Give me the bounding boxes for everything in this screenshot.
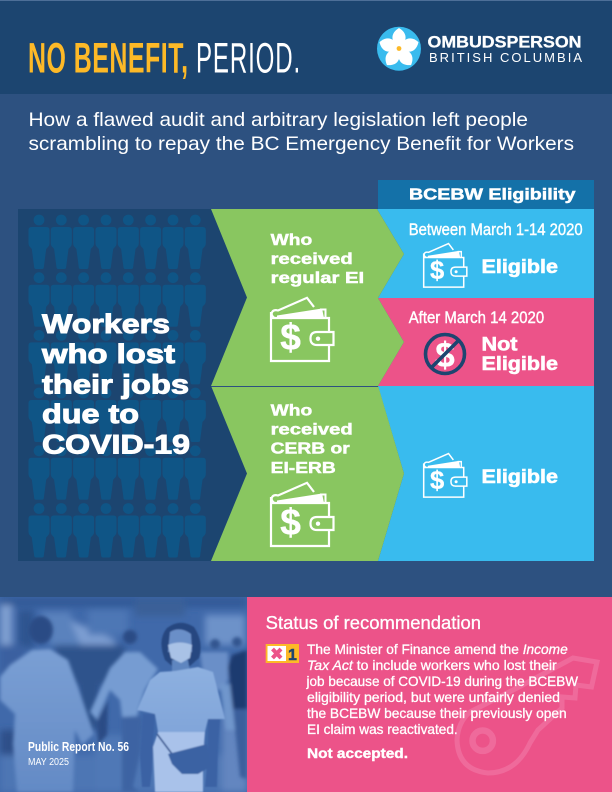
report label: Public Report No. 56 xyxy=(28,740,129,754)
heading: workers: who lost xyxy=(41,339,175,369)
icon: rejected recommendation 1 badge: 1 xyxy=(288,647,297,664)
recommendation text: job because of COVID-19 during the BCEBW xyxy=(306,674,578,689)
chevron: received CERB or EI-ERB xyxy=(211,387,404,561)
icon: wallet xyxy=(271,298,334,361)
icon: rejected recommendation 1 badge xyxy=(266,644,299,664)
status: not accepted: Not accepted. xyxy=(307,745,408,761)
icon: wallet xyxy=(271,483,334,546)
chevron: received regular EI: Who xyxy=(271,232,312,249)
panel: workers who lost their jobs xyxy=(18,209,247,561)
recommendation text xyxy=(306,642,578,737)
panel: eligible between March 1-14 2020: Between March 1-14 2020 xyxy=(409,221,583,239)
panel: eligible CERB or EI-ERB xyxy=(378,386,594,561)
header band xyxy=(0,1,612,94)
panel: not eligible after March 14 2020: Not xyxy=(482,335,518,356)
logo: Ombudsperson British Columbia xyxy=(377,27,582,71)
figure: man in middle xyxy=(90,630,158,792)
heading: workers: due to xyxy=(42,399,139,429)
heading: workers: their jobs xyxy=(42,370,189,400)
panel: not eligible after March 14 2020: After March 14 2020 xyxy=(409,309,544,327)
panel: status of recommendation xyxy=(247,597,612,792)
recommendation text: Tax Act to include workers who lost their xyxy=(307,658,557,673)
figure: people at right xyxy=(200,637,247,779)
chevron: received regular EI: regular EI xyxy=(271,270,364,287)
title: NO BENEFIT, xyxy=(28,35,188,82)
subtitle: scrambling to repay the BC Emergency Benefit for Workers xyxy=(28,133,574,155)
chevron: received regular EI xyxy=(211,209,404,386)
panel: BCEBW eligibility heading xyxy=(378,180,594,209)
panel: not eligible after March 14 2020: Eligible xyxy=(482,354,558,375)
chevron: received CERB or EI-ERB: received xyxy=(271,422,353,438)
panel: not eligible after March 14 2020 xyxy=(378,298,594,386)
panel: eligible CERB or EI-ERB: Eligible xyxy=(482,467,558,488)
photo: masked woman walking in a crowd xyxy=(0,597,247,792)
heading: workers: COVID-19 xyxy=(42,430,190,460)
figure: woman xyxy=(137,623,225,792)
subtitle xyxy=(28,109,574,155)
subtitle: How a flawed audit and arbitrary legislation left people xyxy=(28,109,528,131)
report label: MAY 2025 xyxy=(28,757,69,768)
heading: workers xyxy=(41,309,190,460)
icon: wallet xyxy=(424,244,467,287)
panel: eligible between March 1-14 2020: Eligible xyxy=(482,257,558,278)
logo: Ombudsperson British Columbia: OMBUDSPERSON xyxy=(428,34,582,52)
heading: Status of recommendation xyxy=(266,613,481,633)
title: PERIOD. xyxy=(196,34,300,82)
icon: key watermark xyxy=(457,658,597,773)
figure: man at left xyxy=(0,616,94,792)
chevron: received CERB or EI-ERB: EI-ERB xyxy=(271,460,336,477)
panel: eligible between March 1-14 2020 xyxy=(377,209,594,298)
chevron: received CERB or EI-ERB: CERB or xyxy=(271,440,350,458)
icon: no dollar: $ xyxy=(435,336,455,375)
logo: Ombudsperson British Columbia: BRITISH COLUMBIA xyxy=(429,50,582,65)
icon grid: people xyxy=(28,215,206,558)
panel: BCEBW eligibility heading: BCEBW Eligibility xyxy=(409,186,576,204)
recommendation text: eligibility period, but were unfairly denied xyxy=(307,690,560,705)
recommendation text: EI claim was reactivated. xyxy=(307,722,458,737)
icon: wallet xyxy=(424,454,467,497)
icon: no dollar xyxy=(426,334,464,375)
heading: workers: Workers xyxy=(42,309,170,339)
chevron: received regular EI: received xyxy=(271,251,353,268)
title xyxy=(28,34,300,82)
recommendation text: The Minister of Finance amend the Income xyxy=(307,642,568,657)
recommendation text: the BCEBW because their previously open xyxy=(307,706,567,721)
report label xyxy=(28,742,129,765)
chevron: received CERB or EI-ERB: Who xyxy=(271,402,312,420)
